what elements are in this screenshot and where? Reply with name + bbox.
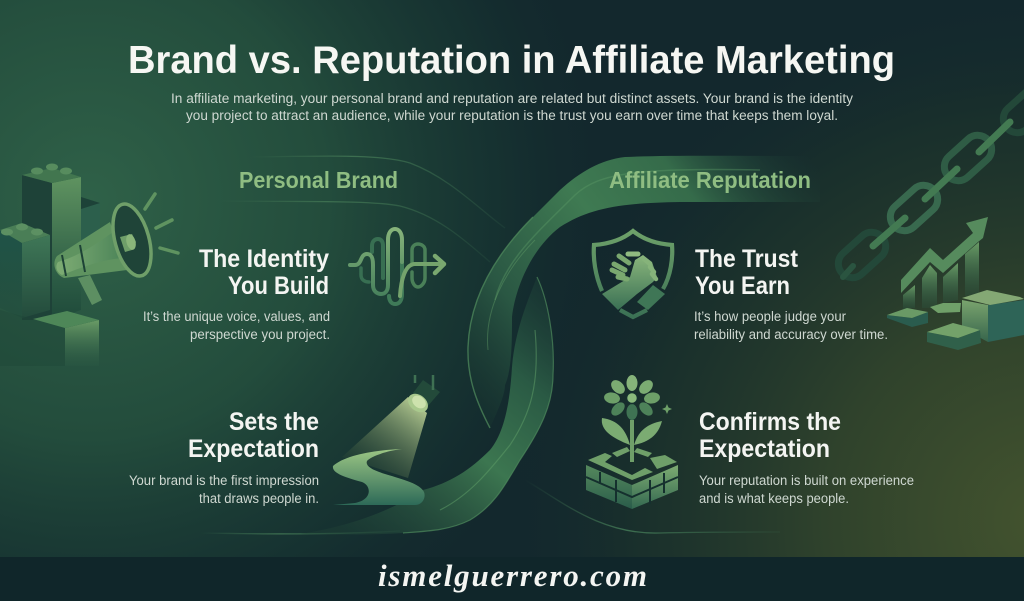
block: The Identity You Build: perspective you project. [190,327,330,342]
block: Sets the Expectation: Expectation [188,435,319,463]
intro paragraph: In affiliate marketing, your personal brand and reputation are related but distinct assets. Your brand is the identity [171,91,853,106]
block: Confirms the Expectation: Confirms the [699,408,841,436]
block: Confirms the Expectation: Expectation [699,435,830,463]
block: The Trust You Earn: It’s how people judge your [694,309,846,324]
icon: spotlight on road [333,375,440,505]
connecting thin curves [200,156,780,534]
intro paragraph: you project to attract an audience, while your reputation is the trust you earn over time that keeps them loyal. [186,108,838,123]
footer band: ismelguerrero.com [378,558,647,593]
block: Sets the Expectation: Your brand is the first impression [129,473,319,488]
block: Confirms the Expectation: Your reputation is built on experience [699,473,914,488]
icon: shield with handshake [594,231,672,317]
heading: Affiliate Reputation: Affiliate Reputation [609,167,811,193]
block: The Identity You Build: It’s the unique voice, values, and [143,309,330,324]
block: Confirms the Expectation: and is what keeps people. [699,491,849,506]
block: The Trust You Earn: You Earn [695,272,790,300]
block: Confirms the Expectation [699,408,914,506]
block: The Trust You Earn [694,245,888,342]
block: The Identity You Build: You Build [228,272,329,300]
icon: megaphone [54,194,178,305]
block: Sets the Expectation [129,408,319,506]
icon: flower in brick planter [586,375,678,509]
block: Sets the Expectation: that draws people in. [199,491,319,506]
block: The Trust You Earn: The Trust [695,245,799,273]
icon: building blocks [0,164,100,366]
central ribbon [300,156,820,535]
icon: rising chart and blocks [887,217,1024,350]
block: The Trust You Earn: reliability and accuracy over time. [694,327,888,342]
block: Sets the Expectation: Sets the [229,408,319,436]
intro paragraph [171,91,853,123]
block: The Identity You Build [143,245,330,342]
icon: chain [833,82,1024,283]
heading: Personal Brand: Personal Brand [239,167,398,193]
block: The Identity You Build: The Identity [199,245,329,273]
title: Brand vs. Reputation in Affiliate Marketing [128,39,895,82]
footer band [0,557,1024,601]
icon: sound wave arrow [350,229,444,304]
